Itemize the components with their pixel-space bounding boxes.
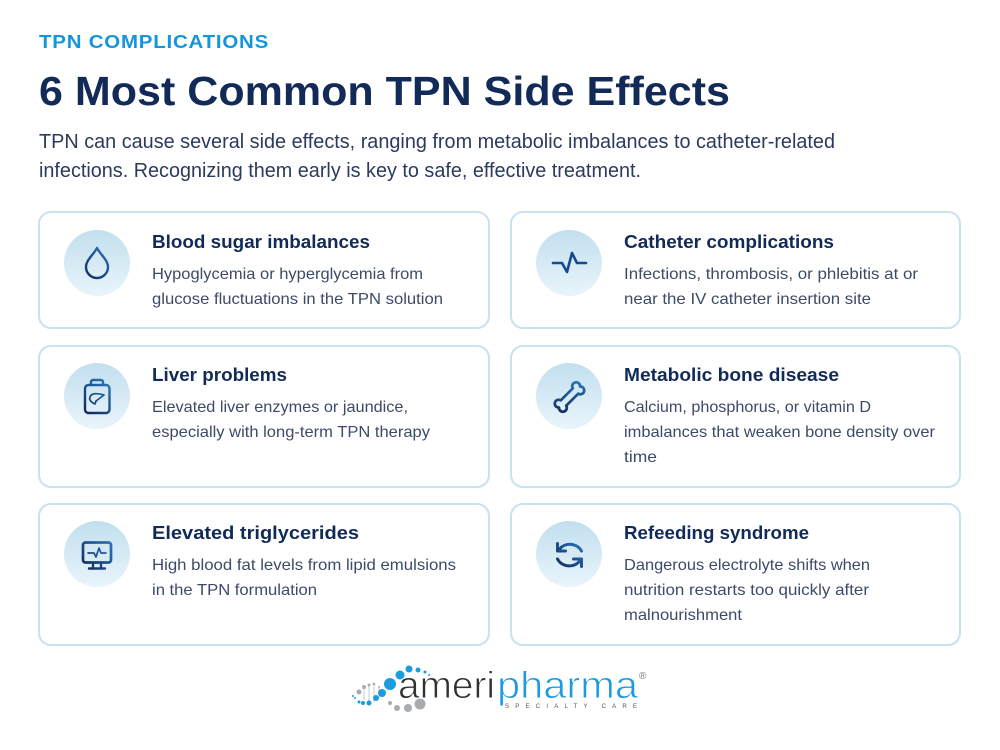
- logo wordmark: ameri: [398, 665, 495, 707]
- logo wordmark: pharma: [497, 665, 639, 707]
- description: refeeding syndrome: [624, 557, 870, 624]
- description: metabolic bone disease: Calcium, phosphorus, or vitamin D: [624, 399, 871, 416]
- description: blood sugar imbalances: [152, 266, 443, 308]
- heading: metabolic bone disease: Metabolic bone disease: [624, 364, 839, 385]
- title: 6 Most Common TPN Side Effects: [39, 68, 730, 114]
- description: blood sugar imbalances: glucose fluctuations in the TPN solution: [152, 291, 443, 308]
- panel: metabolic bone disease: [511, 346, 960, 487]
- description: refeeding syndrome: nutrition restarts too quickly after: [624, 582, 870, 599]
- intro text: TPN can cause several side effects, ranging from metabolic imbalances to catheter-related: [39, 131, 835, 153]
- description: refeeding syndrome: Dangerous electrolyte shifts when: [624, 557, 870, 574]
- description: liver problems: especially with long-term TPN therapy: [152, 424, 430, 441]
- eyebrow heading: TPN COMPLICATIONS: [39, 31, 269, 52]
- panel: blood sugar imbalances: [39, 212, 489, 328]
- logo wordmark: [398, 665, 639, 707]
- intro text: [39, 131, 835, 182]
- heading: liver problems: Liver problems: [152, 364, 287, 385]
- panel: elevated triglycerides: [39, 504, 489, 645]
- heading: catheter complications: Catheter complications: [624, 231, 834, 252]
- icon: water drop: [86, 248, 108, 278]
- icon: bone: [553, 381, 586, 413]
- description: catheter complications: [624, 266, 919, 308]
- icon: monitor: [83, 542, 111, 568]
- heading: blood sugar imbalances: Blood sugar imbalances: [152, 231, 370, 252]
- panel: liver problems: [39, 346, 489, 487]
- description: metabolic bone disease: [624, 399, 936, 466]
- logo tagline: SPECIALTY CARE: [505, 704, 637, 710]
- description: catheter complications: Infections, thrombosis, or phlebitis at or: [624, 266, 919, 283]
- registered mark: ®: [639, 671, 647, 682]
- description: blood sugar imbalances: Hypoglycemia or hyperglycemia from: [152, 266, 423, 283]
- description: liver problems: [152, 399, 430, 441]
- logo: ameripharma: [352, 665, 647, 712]
- description: catheter complications: near the IV catheter insertion site: [624, 291, 871, 308]
- description: elevated triglycerides: in the TPN formulation: [152, 582, 317, 599]
- icon: pulse line: [553, 253, 586, 272]
- icon: liver clipboard: [85, 380, 110, 413]
- intro text: infections. Recognizing them early is key to safe, effective treatment.: [39, 160, 641, 182]
- description: liver problems: Elevated liver enzymes or jaundice,: [152, 399, 408, 416]
- description: metabolic bone disease: imbalances that weaken bone density over: [624, 424, 936, 441]
- description: metabolic bone disease: time: [624, 449, 657, 466]
- description: elevated triglycerides: [152, 557, 456, 599]
- heading: refeeding syndrome: Refeeding syndrome: [624, 522, 809, 543]
- logo dots: [352, 666, 430, 712]
- heading: elevated triglycerides: Elevated triglycerides: [152, 522, 359, 543]
- description: refeeding syndrome: malnourishment: [624, 607, 743, 624]
- panel: catheter complications: [511, 212, 960, 328]
- icon: refresh arrows: [558, 544, 582, 566]
- panel: refeeding syndrome: [511, 504, 960, 645]
- description: elevated triglycerides: High blood fat levels from lipid emulsions: [152, 557, 456, 574]
